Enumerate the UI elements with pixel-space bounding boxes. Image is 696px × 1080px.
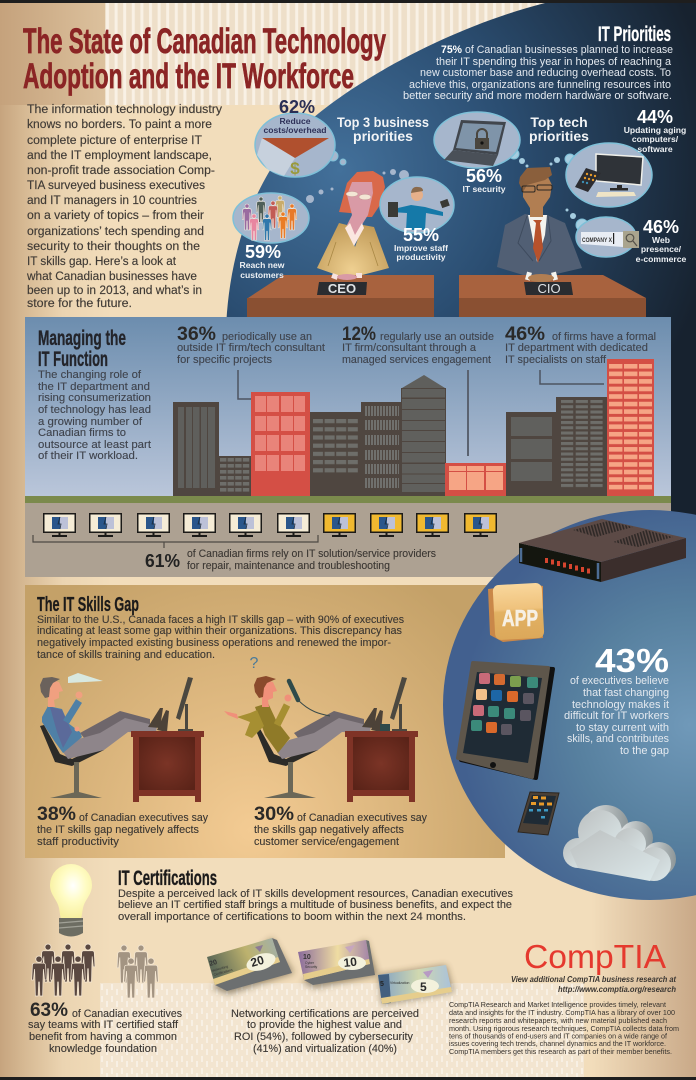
bubble: updating aging computers 44%: software bbox=[637, 144, 673, 154]
IT Priorities text: new customer base and reducing overhead costs. To bbox=[420, 67, 671, 79]
about CompTIA text: CompTIA members get this research as part of their member benefits. bbox=[449, 1047, 672, 1056]
heading: top tech priorities: Top tech bbox=[530, 114, 588, 130]
skills gap text: negatively impacted existing business operations and renewed the impor- bbox=[37, 637, 391, 649]
stat: 36%: for specific projects bbox=[177, 354, 272, 366]
intro text: security to their thoughts on the bbox=[27, 239, 200, 253]
stat: 43%: to stay current with bbox=[576, 722, 669, 734]
bill: 20 networking: Certifications bbox=[213, 968, 233, 977]
networking certifications text: Networking certifications are perceived bbox=[231, 1008, 419, 1020]
striped top texture bbox=[105, 3, 550, 105]
CEO desk bbox=[247, 275, 434, 317]
stat: 63% bbox=[28, 1000, 182, 1055]
stat: 43%: difficult for IT workers bbox=[564, 710, 670, 722]
people: certified staff bbox=[32, 944, 95, 996]
intro text: The information technology industry bbox=[27, 102, 223, 116]
stat: 30%: 30% bbox=[254, 804, 294, 825]
stat: 38%: 38% bbox=[37, 804, 76, 825]
stat: 36%: outside IT firm/tech consultant bbox=[177, 342, 325, 354]
stat: 63%: knowledge foundation bbox=[49, 1043, 157, 1055]
managing text: The changing role of bbox=[38, 369, 142, 381]
stat: 61%: 61% bbox=[145, 551, 180, 571]
skills gap text: Similar to the U.S., Canada faces a high IT skills gap – with 90% of executives bbox=[37, 614, 404, 626]
bubble: updating aging computers 44%: 44% bbox=[637, 107, 673, 127]
title bbox=[23, 22, 386, 96]
heading: top 3 business priorities: Top 3 business bbox=[337, 114, 429, 130]
stat: 38%: the IT skills gap negatively affects bbox=[37, 824, 199, 836]
certifications text bbox=[118, 888, 513, 923]
icon: tablet bbox=[458, 663, 553, 778]
people: non-certified staff bbox=[117, 945, 158, 998]
managing text bbox=[38, 369, 151, 462]
stat: 46%: IT specialists on staff bbox=[505, 354, 607, 366]
managing text: of their IT workload. bbox=[38, 450, 138, 462]
bill: 5 virtualization: Virtualization bbox=[390, 981, 409, 985]
CIO name plate: CIO bbox=[537, 281, 561, 296]
panel: IT priorities background bbox=[226, 3, 696, 560]
stat: 30%: customer service/engagement bbox=[254, 836, 399, 848]
managing text: Canadian firms to bbox=[38, 427, 126, 439]
certifications text: overall importance of certifications to boom within the next 24 months. bbox=[118, 911, 466, 923]
stat: 12% bbox=[342, 324, 494, 366]
intro text: non-profit trade association Comp- bbox=[27, 163, 215, 177]
networking certifications text: (41%) and virtualization (40%) bbox=[253, 1043, 397, 1055]
bubble: reduce costs 62%: $ bbox=[290, 159, 300, 178]
CIO desk bbox=[459, 275, 646, 317]
managing text: of technology has lead bbox=[38, 404, 151, 416]
bill: 5 virtualization bbox=[378, 965, 454, 1005]
city skyline bbox=[173, 359, 654, 496]
stat: 30% bbox=[254, 804, 427, 848]
intro text bbox=[26, 102, 223, 310]
IT Priorities text: 75% bbox=[441, 44, 462, 56]
icon: smartphone bbox=[518, 792, 559, 835]
intro text: on a variety of topics – from their bbox=[27, 208, 204, 222]
intro text: organizations’ tech spending and bbox=[27, 224, 204, 238]
icon: cloud bbox=[563, 805, 676, 881]
stat: 12%: managed services engagement bbox=[342, 354, 491, 366]
stat: 46%: 46% bbox=[505, 324, 545, 345]
stat: 63%: of Canadian executives bbox=[72, 1008, 182, 1020]
intro text: complete picture of enterprise IT bbox=[27, 133, 202, 147]
panel: IT skills gap bbox=[25, 585, 505, 858]
bill: 10 cyber security: Security bbox=[305, 965, 318, 969]
panel: managing the IT function bbox=[25, 317, 671, 577]
about CompTIA text: CompTIA Research and Market Intelligence provides timely, relevant bbox=[449, 1000, 667, 1009]
CEO name plate bbox=[317, 281, 367, 296]
stat: 61%: for repair, maintenance and troubleshooting bbox=[187, 560, 390, 572]
bill: 20 networking: 20 bbox=[249, 953, 266, 970]
about CompTIA text: tens of thousands of end-users and IT companies on a wide range of bbox=[449, 1032, 668, 1040]
intro text: knows no borders. To paint a more bbox=[27, 117, 212, 131]
bill: 5 virtualization: 5 bbox=[380, 981, 384, 988]
heading: top tech priorities: priorities bbox=[529, 128, 589, 144]
certifications text: Despite a perceived lack of IT skills development resources, Canadian executives bbox=[118, 888, 513, 900]
bubble: improve staff productivity 55% bbox=[380, 169, 454, 262]
about CompTIA text: issues covering tech trends, channel dynamics and the IT workforce. bbox=[449, 1039, 666, 1048]
bubble: reduce costs 62% bbox=[255, 97, 346, 178]
IT Priorities text: better security and more modern hardware or software. bbox=[403, 90, 672, 102]
bubble: web presence 46%: Web bbox=[652, 235, 670, 245]
bubble: IT security 56% bbox=[434, 112, 528, 194]
bubble: updating aging computers 44%: computers/ bbox=[632, 134, 679, 144]
managing text: a growing number of bbox=[38, 416, 143, 428]
bubble: improve staff productivity 55%: 55% bbox=[403, 225, 439, 245]
stat: 38%: staff productivity bbox=[37, 836, 120, 848]
stat: 36%: periodically use an bbox=[222, 331, 312, 343]
bubble: web presence 46%: e-commerce bbox=[636, 254, 687, 264]
bubble: reach new customers 59%: 59% bbox=[245, 242, 281, 262]
about CompTIA text: research reports and whitepapers, with new material published each bbox=[449, 1016, 667, 1025]
stat: 38%: of Canadian executives say bbox=[79, 812, 208, 824]
intro text: been up to in 2013, and what’s in bbox=[27, 283, 202, 297]
heading: IT skills gap: The IT Skills Gap bbox=[37, 594, 139, 616]
bubble: reach new customers 59% bbox=[233, 188, 334, 280]
heading: managing the IT function: Managing the bbox=[38, 327, 126, 350]
stat: 38% bbox=[37, 804, 208, 848]
CompTIA logo: CompTIA bbox=[524, 938, 666, 975]
stat: 46% bbox=[505, 324, 656, 366]
stat: 63%: benefit from having a common bbox=[29, 1031, 177, 1043]
bubble: web presence 46%: presence/ bbox=[641, 244, 682, 254]
stat: 63%: 63% bbox=[30, 1000, 68, 1021]
CompTIA research link bbox=[511, 974, 677, 994]
stat: 30%: of Canadian executives say bbox=[297, 812, 427, 824]
bill: 10 cyber security: 10 bbox=[303, 954, 311, 961]
stat: 43% bbox=[564, 642, 670, 757]
figure: CEO bbox=[317, 171, 389, 275]
CIO hands bbox=[525, 272, 558, 282]
bill: 10 cyber security: 10 bbox=[343, 955, 358, 970]
figure: CIO bbox=[497, 167, 582, 275]
intro text: what Canadian businesses have bbox=[26, 269, 197, 283]
bill: 20 networking: Networking bbox=[211, 964, 229, 973]
bracket bbox=[33, 535, 318, 548]
bubble: reduce costs 62%: Reduce bbox=[279, 116, 311, 126]
bubble: updating aging computers 44%: Updating aging bbox=[624, 125, 686, 135]
managing text: the IT department and bbox=[38, 381, 150, 393]
stat: 12%: 12% bbox=[342, 324, 376, 345]
leader lines bbox=[238, 370, 604, 456]
managing text: outsource at least part bbox=[38, 439, 151, 451]
heading: top 3 business priorities: priorities bbox=[353, 128, 413, 144]
figure: man with paper plane at desk bbox=[40, 673, 204, 802]
CEO name plate: CEO bbox=[328, 281, 356, 296]
IT Priorities text: of Canadian businesses planned to increase bbox=[465, 44, 673, 56]
CIO name plate bbox=[524, 281, 573, 296]
monitors row bbox=[43, 513, 497, 537]
networking certifications text: ROI (54%), followed by cybersecurity bbox=[234, 1031, 413, 1043]
bubble: updating aging computers 44% bbox=[550, 107, 686, 207]
IT Priorities text: their IT spending this year in hopes of reaching a bbox=[436, 56, 672, 68]
stat: 46%: IT department with dedicated bbox=[505, 342, 648, 354]
heading: managing the IT function: IT Function bbox=[38, 348, 108, 371]
stat: 46%: of firms have a formal bbox=[552, 331, 656, 343]
networking certifications text bbox=[231, 1008, 419, 1055]
CEO hands bbox=[331, 273, 362, 280]
skills gap text bbox=[37, 614, 404, 661]
stat: 36%: 36% bbox=[177, 324, 216, 345]
bubble: improve staff productivity 55%: productivity bbox=[396, 252, 446, 262]
certifications text: believe an IT certified staff brings a multitude of business benefits, and expect the bbox=[118, 899, 512, 911]
intro text: and the IT employment landscape, bbox=[27, 148, 212, 162]
skills gap text: tance of skills training and education. bbox=[37, 649, 215, 661]
bubble: reduce costs 62%: costs/overhead bbox=[263, 125, 327, 135]
bubble: IT security 56%: 56% bbox=[466, 166, 502, 186]
stat: 63%: say teams with IT certified staff bbox=[28, 1019, 179, 1031]
IT Priorities text: achieve this, organizations are funneling resources into bbox=[409, 79, 671, 91]
stat: 43%: technology makes it bbox=[572, 699, 669, 711]
striped bottom texture bbox=[100, 983, 584, 1077]
title: The State of Canadian Technology bbox=[23, 22, 386, 61]
intro text: store for the future. bbox=[27, 296, 132, 310]
bill: 10 cyber security: Cyber bbox=[305, 961, 315, 965]
stat: 43%: skills, and contributes bbox=[567, 733, 669, 745]
stat: 30%: the skills gap negatively affects bbox=[254, 824, 404, 836]
IT Priorities text bbox=[403, 44, 673, 102]
heading: top 3 business priorities bbox=[337, 114, 429, 144]
panel: blue circle bbox=[443, 510, 696, 900]
CompTIA research link: View additional CompTIA business research at bbox=[511, 974, 677, 984]
heading: top tech priorities bbox=[529, 114, 589, 144]
bubble: reduce costs 62%: 62% bbox=[279, 97, 315, 117]
about CompTIA text: data and insights for the IT industry. CompTIA has a library of over 100 bbox=[449, 1008, 675, 1017]
stat: 43%: that fast changing bbox=[583, 687, 669, 699]
bubble: reach new customers 59%: Reach new bbox=[240, 260, 285, 270]
figure: man on phone at desk bbox=[224, 676, 418, 802]
skills gap text: indicating at least some gap within their organizations. This discrepancy has bbox=[37, 625, 402, 637]
icon: light bulb bbox=[50, 864, 92, 936]
icon: server router bbox=[519, 519, 686, 582]
title: Adoption and the IT Workforce bbox=[23, 57, 354, 96]
stat: 36% bbox=[177, 324, 325, 366]
bill: 10 cyber security bbox=[298, 940, 378, 988]
managing text: rising consumerization bbox=[38, 392, 151, 404]
intro text: IT skills gap. Here’s a look at bbox=[27, 254, 177, 268]
bill: 20 networking bbox=[207, 938, 294, 994]
stat: 12%: regularly use an outside bbox=[380, 331, 494, 343]
heading: managing the IT function bbox=[38, 327, 126, 371]
bubble: IT security 56%: IT security bbox=[462, 184, 506, 194]
intro text: TIA surveyed business executives bbox=[27, 178, 205, 192]
stat: 61%: of Canadian firms rely on IT solution/service providers bbox=[187, 548, 436, 560]
bubble: reach new customers 59%: customers bbox=[240, 270, 284, 280]
stat: 43%: of executives believe bbox=[570, 675, 669, 687]
question mark: ? bbox=[250, 655, 259, 672]
stat: 12%: IT firm/consultant through a bbox=[342, 342, 477, 354]
CompTIA research link: http://www.comptia.org/research bbox=[558, 984, 676, 994]
bubble: improve staff productivity 55%: Improve staff bbox=[394, 243, 448, 253]
bubble: web presence 46% bbox=[566, 208, 687, 264]
bubble: web presence 46%: 46% bbox=[643, 217, 679, 237]
bubble: web presence 46%: COMPANY X bbox=[582, 238, 612, 244]
intro text: and IT managers in 10 countries bbox=[27, 193, 197, 207]
stat: 61% bbox=[145, 548, 436, 572]
icon: app tile bbox=[488, 583, 544, 642]
stat: 43%: to the gap bbox=[620, 745, 669, 757]
icon: app tile: APP bbox=[502, 605, 538, 631]
bill: 20 networking: 20 bbox=[209, 959, 218, 968]
about CompTIA text bbox=[449, 1000, 679, 1056]
about CompTIA text: month. Using rigorous research techniques, CompTIA collects data from bbox=[449, 1024, 679, 1033]
heading: IT certifications: IT Certifications bbox=[118, 867, 217, 890]
networking certifications text: to provide the highest value and bbox=[247, 1019, 402, 1031]
bill: 5 virtualization: 5 bbox=[420, 980, 427, 994]
stat: 43%: 43% bbox=[595, 642, 669, 679]
